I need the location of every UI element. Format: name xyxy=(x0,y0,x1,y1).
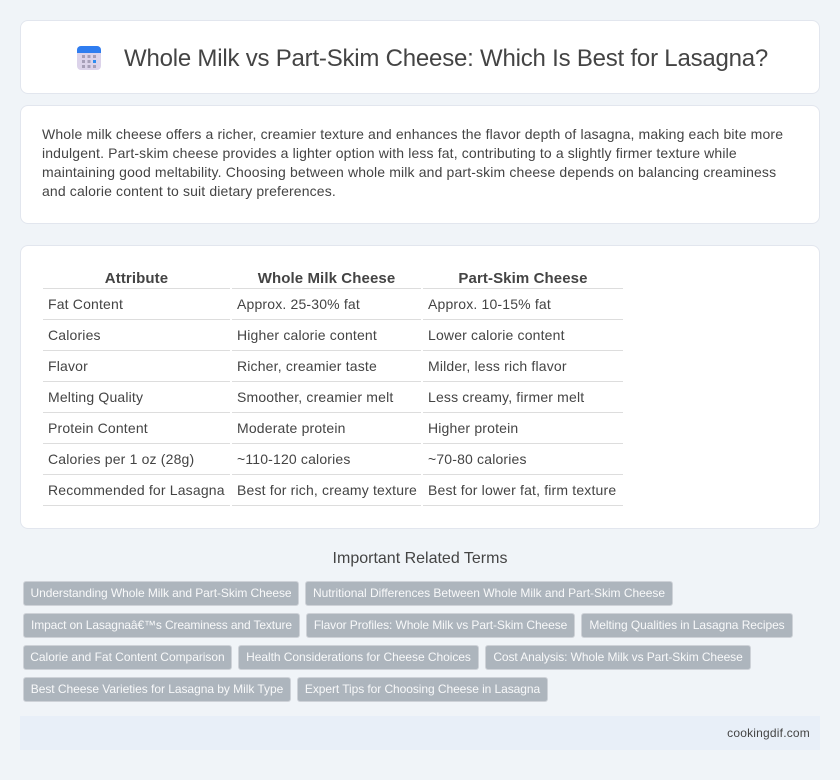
row: calories per ounce: ~110-120 calories xyxy=(237,451,351,467)
row: fat content: Approx. 10-15% fat xyxy=(428,296,551,312)
row: fat content: Approx. 25-30% fat xyxy=(237,296,360,312)
icon: calendar xyxy=(77,46,101,70)
tag xyxy=(581,613,793,638)
tag: Nutritional Differences Between Whole Milk and Part-Skim Cheese xyxy=(313,586,665,600)
heading: related terms: Important Related Terms xyxy=(333,550,507,567)
intro paragraph: maintaining good meltability. Choosing between whole milk and part-skim cheese depends on balancing creaminess xyxy=(42,164,776,180)
row: recommended for lasagna: Best for lower fat, firm texture xyxy=(428,482,616,498)
row: protein content: Moderate protein xyxy=(237,420,346,436)
tag xyxy=(23,677,291,702)
intro paragraph: Whole milk cheese offers a richer, creamier texture and enhances the flavor depth of lasagna, making each bite more xyxy=(42,126,783,142)
footer: cookingdif.com xyxy=(727,726,810,740)
tag: Expert Tips for Choosing Cheese in Lasagna xyxy=(305,682,540,696)
row: protein content: Protein Content xyxy=(48,420,148,436)
row: protein content xyxy=(43,420,623,444)
row: flavor: Milder, less rich flavor xyxy=(428,358,567,374)
title: Whole Milk vs Part-Skim Cheese: Which Is Best for Lasagna? xyxy=(124,45,768,72)
row: flavor xyxy=(43,358,623,382)
tag: Calorie and Fat Content Comparison xyxy=(30,650,225,664)
tag xyxy=(305,581,673,606)
row: flavor: Richer, creamier taste xyxy=(237,358,377,374)
panel: comparison table xyxy=(20,245,820,529)
row: recommended for lasagna xyxy=(43,482,623,506)
tag xyxy=(485,645,751,670)
tag xyxy=(23,581,299,606)
row: recommended for lasagna: Best for rich, creamy texture xyxy=(237,482,417,498)
tag: Flavor Profiles: Whole Milk vs Part-Skim Cheese xyxy=(314,618,567,632)
table header: Attribute xyxy=(105,270,168,287)
tag: Health Considerations for Cheese Choices xyxy=(246,650,471,664)
tag: Impact on Lasagnaâ€™s Creaminess and Texture xyxy=(31,618,292,632)
intro paragraph: and calorie content to suit dietary preferences. xyxy=(42,183,336,199)
row: calories per ounce: ~70-80 calories xyxy=(428,451,527,467)
table header xyxy=(43,270,623,289)
row: recommended for lasagna: Recommended for Lasagna xyxy=(48,482,225,498)
row: melting quality: Smoother, creamier melt xyxy=(237,389,393,405)
intro paragraph: indulgent. Part-skim cheese provides a lighter option with less fat, contributing to a slightly firmer texture while xyxy=(42,145,737,161)
row: melting quality: Less creamy, firmer melt xyxy=(428,389,584,405)
tag: Understanding Whole Milk and Part-Skim Cheese xyxy=(31,586,291,600)
tag xyxy=(306,613,575,638)
row: calories per ounce xyxy=(43,451,623,475)
panel: related term tags xyxy=(23,581,793,702)
tag: Cost Analysis: Whole Milk vs Part-Skim Cheese xyxy=(493,650,743,664)
table header: Part-Skim Cheese xyxy=(458,270,588,287)
tag xyxy=(23,645,232,670)
panel: title header xyxy=(20,20,820,94)
row: melting quality: Melting Quality xyxy=(48,389,143,405)
row: calories xyxy=(43,327,623,351)
row: calories: Lower calorie content xyxy=(428,327,565,343)
tag xyxy=(238,645,479,670)
row: fat content xyxy=(43,296,623,320)
panel: introduction text xyxy=(20,105,820,224)
tag: Melting Qualities in Lasagna Recipes xyxy=(589,618,785,632)
tag: Best Cheese Varieties for Lasagna by Milk Type xyxy=(31,682,283,696)
tag xyxy=(297,677,548,702)
row: protein content: Higher protein xyxy=(428,420,518,436)
tag xyxy=(23,613,300,638)
row: calories: Calories xyxy=(48,327,101,343)
row: fat content: Fat Content xyxy=(48,296,123,312)
row: calories: Higher calorie content xyxy=(237,327,377,343)
row: melting quality xyxy=(43,389,623,413)
intro paragraph xyxy=(42,126,783,199)
table header: Whole Milk Cheese xyxy=(258,270,395,287)
row: flavor: Flavor xyxy=(48,358,88,374)
row: calories per ounce: Calories per 1 oz (28g) xyxy=(48,451,194,467)
footer xyxy=(20,716,820,750)
